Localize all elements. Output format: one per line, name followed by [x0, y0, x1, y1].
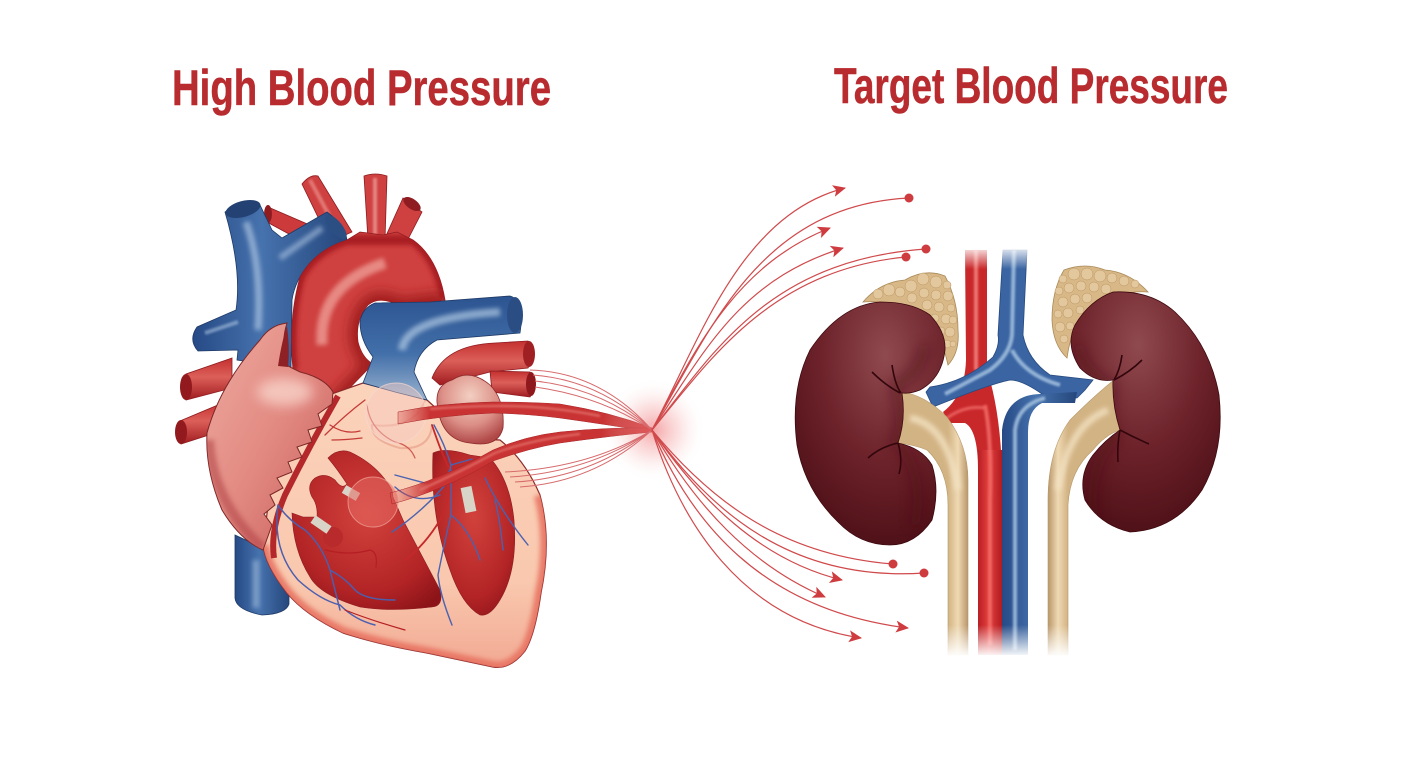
upper arteries: arch branches: [264, 174, 423, 250]
heart strings: [313, 487, 471, 530]
left atrial dome: [437, 375, 503, 444]
pulmonary artery, blue: [360, 296, 523, 400]
left kidney: [795, 302, 945, 545]
translucent aortic valve circle: [366, 383, 426, 443]
left ureter: [898, 392, 968, 655]
inferior vena cava: [235, 535, 289, 615]
line to lower dot: [652, 257, 906, 430]
line to dot one: [652, 430, 893, 564]
title: High Blood Pressure: High Blood Pressure: [172, 60, 551, 116]
pulmonary vein stubs, right: [432, 341, 536, 397]
convergence glow: [602, 378, 706, 482]
arrow three: [652, 248, 843, 430]
line to dot two: [652, 430, 924, 574]
lower thick red vessel to convergence point: [390, 428, 652, 504]
downward arrow end dots: [888, 560, 928, 578]
groove along cut edge of atrium: [273, 396, 338, 558]
illustration: kidneys and vessels: [795, 245, 1220, 657]
upper thick red vessel to convergence point: [398, 402, 652, 432]
illustration: heart: [175, 174, 652, 667]
top fade of vessels: [955, 245, 1040, 269]
highlights on thick vessels: [420, 406, 600, 490]
arrow two: [652, 430, 825, 597]
right ureter: [1048, 380, 1120, 655]
aorta: [943, 250, 1002, 655]
left ventricle chamber: [292, 451, 441, 610]
heart body, cut open: [263, 383, 546, 667]
arrow one: [652, 430, 842, 580]
upward arrows from convergence: [652, 188, 926, 430]
superior vena cava, blue: [193, 197, 350, 368]
aortic arch: [292, 232, 445, 404]
coronary vessels: [277, 400, 528, 630]
bottom fade of vessels and ureters: [940, 625, 1080, 657]
arrow to upper point: [652, 188, 845, 430]
fine nerve lines from heart to convergence: [505, 370, 652, 487]
translucent ventricle circle: [348, 477, 398, 527]
arrow two: [652, 228, 830, 430]
arrow four: [652, 430, 861, 638]
right ventricle chamber: [433, 450, 515, 615]
line to top dot: [652, 198, 909, 430]
title: Target Blood Pressure: Target Blood Pressure: [834, 58, 1228, 114]
vena cava and renal veins: [926, 250, 1093, 655]
arrow three: [652, 430, 908, 628]
infographic: heart to kidneys: [174, 66, 1227, 668]
left adrenal gland: [863, 273, 958, 365]
right atrium: [207, 323, 333, 550]
upward arrow end dots: [902, 194, 930, 262]
pulmonary vein stubs, left: [175, 358, 232, 444]
right adrenal gland: [1052, 266, 1148, 358]
downward arrows from convergence: [652, 430, 924, 638]
right kidney: [1071, 292, 1220, 532]
line to right dot: [652, 249, 926, 430]
